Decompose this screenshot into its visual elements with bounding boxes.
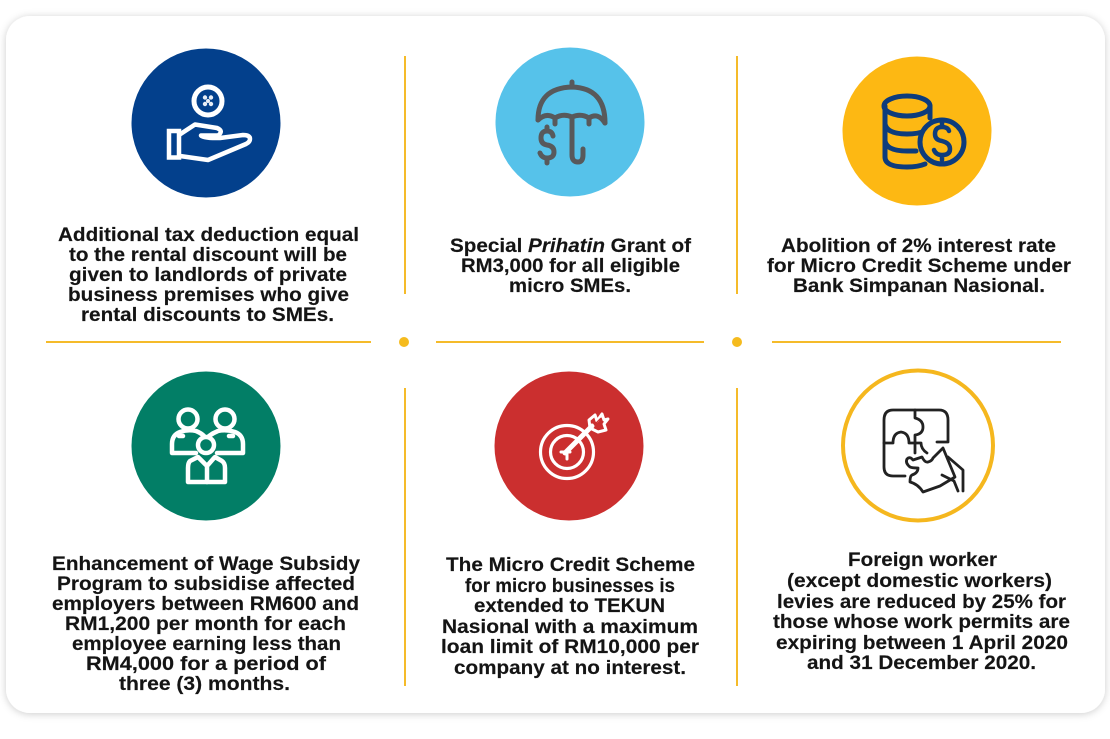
text: foreign worker levies — [773, 550, 1070, 674]
icon: target with arrow on red circle — [494, 372, 644, 520]
text: special Prihatin grant — [450, 236, 692, 297]
text: rental discount tax deduction: to the rental discount will be — [69, 245, 347, 266]
text: foreign worker levies: (except domestic workers) — [787, 571, 1052, 592]
text: rental discount tax deduction: Additional tax deduction equal — [58, 225, 359, 246]
text: foreign worker levies: and 31 December 2020. — [807, 653, 1036, 674]
text: micro credit scheme TEKUN: Nasional with a maximum — [442, 617, 698, 638]
text: wage subsidy program: employers between RM600 and — [52, 594, 359, 615]
text: rental discount tax deduction: business premises who give — [68, 285, 349, 306]
text: wage subsidy program: Program to subsidise affected — [57, 574, 355, 595]
icon: three people on green circle — [132, 372, 280, 520]
text: wage subsidy program — [52, 554, 360, 695]
icon: hand holding coin on blue circle — [132, 48, 280, 198]
text: rental discount tax deduction: rental discounts to SMEs. — [81, 305, 334, 326]
text: micro credit scheme TEKUN — [441, 555, 700, 679]
text: foreign worker levies: Foreign worker — [848, 550, 998, 571]
text: abolition of interest rate: Bank Simpanan Nasional. — [793, 276, 1045, 297]
text: wage subsidy program: Enhancement of Wage Subsidy — [52, 554, 360, 575]
text: abolition of interest rate: for Micro Credit Scheme under — [767, 256, 1072, 277]
text: special Prihatin grant: Special Prihatin Grant of — [450, 236, 692, 257]
text: micro credit scheme TEKUN: The Micro Credit Scheme — [446, 555, 695, 576]
text: micro credit scheme TEKUN: loan limit of RM10,000 per — [441, 637, 700, 658]
text: special Prihatin grant: micro SMEs. — [509, 276, 631, 297]
text: rental discount tax deduction: given to landlords of private — [69, 265, 347, 286]
text: wage subsidy program: RM1,200 per month for each — [65, 614, 346, 635]
text: wage subsidy program: three (3) months. — [119, 674, 290, 695]
text: wage subsidy program: employee earning less than — [72, 634, 341, 655]
text: special Prihatin grant: RM3,000 for all eligible — [461, 256, 680, 277]
text: abolition of interest rate: Abolition of 2% interest rate — [781, 236, 1056, 257]
text: micro credit scheme TEKUN: company at no interest. — [454, 658, 686, 679]
text: foreign worker levies: levies are reduced by 25% for — [777, 592, 1067, 613]
text: foreign worker levies: expiring between 1 April 2020 — [776, 633, 1068, 654]
text: foreign worker levies: those whose work permits are — [773, 612, 1070, 633]
text: abolition of interest rate — [767, 236, 1072, 297]
icon: umbrella with dollar on light blue circle — [496, 48, 644, 196]
text: micro credit scheme TEKUN: for micro businesses is — [465, 576, 675, 597]
icon: puzzle and hand in yellow ring — [843, 370, 993, 520]
text: rental discount tax deduction — [58, 225, 359, 326]
text: micro credit scheme TEKUN: extended to TEKUN — [474, 596, 665, 617]
text: wage subsidy program: RM4,000 for a period of — [86, 654, 327, 675]
icon: coin stack on yellow circle — [842, 56, 992, 206]
